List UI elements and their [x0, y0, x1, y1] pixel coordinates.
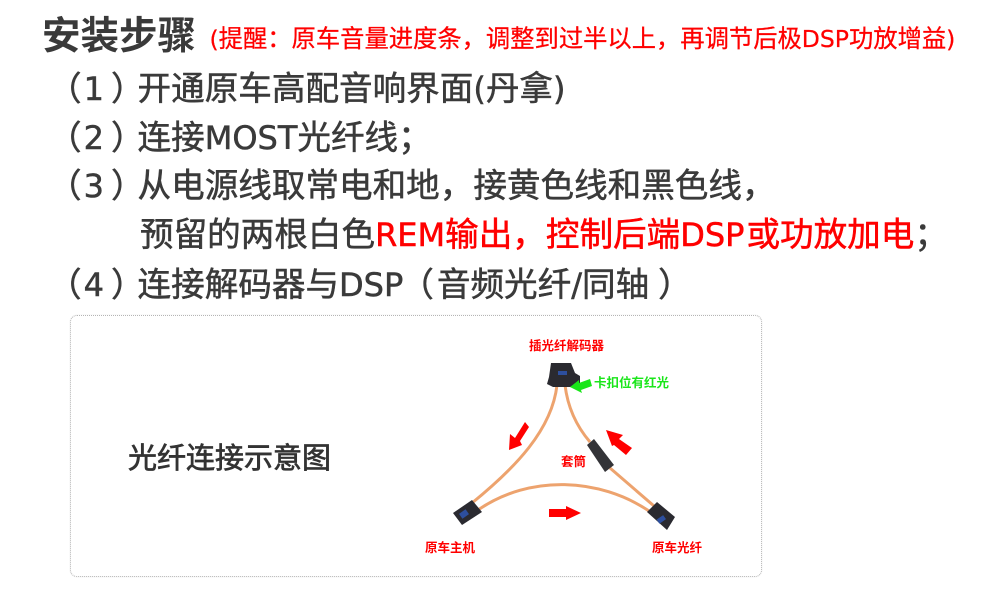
reminder note: (提醒：原车音量进度条，调整到过半以上，再调节后极DSP功放增益) — [210, 19, 955, 54]
cable: head unit to car fibre — [478, 485, 649, 511]
panel heading: 光纤连接示意图 — [128, 435, 331, 477]
cable: car fibre to decoder with sleeve — [565, 385, 654, 506]
step 1: （1）开通原车高配音响界面(丹拿) — [48, 61, 565, 110]
head unit connector — [453, 500, 482, 525]
label: head unit: 原车主机 — [425, 537, 476, 556]
title: 安装步骤 — [42, 5, 196, 61]
decoder connector — [547, 363, 580, 387]
step 4: （4）连接解码器与DSP（音频光纤/同轴 ） — [48, 257, 692, 306]
arrow: right — [549, 506, 581, 520]
panel: fibre diagram — [70, 315, 762, 577]
car fibre connector — [647, 502, 675, 530]
label: car fibre: 原车光纤 — [652, 537, 703, 556]
step 2: （2）连接MOST光纤线； — [48, 110, 432, 159]
arrow: green — [570, 379, 592, 393]
arrow: down-left — [509, 422, 529, 450]
label: red light: 卡扣位有红光 — [594, 372, 670, 391]
sleeve — [587, 439, 614, 472]
arrow: up-left — [606, 430, 632, 455]
cable: decoder to head unit — [472, 385, 557, 503]
label: sleeve: 套筒 — [561, 451, 586, 470]
step 3 continuation: 预留的两根白色REM输出，控制后端DSP或功放加电； — [140, 207, 948, 256]
label: decoder: 插光纤解码器 — [529, 335, 605, 354]
step 3: （3）从电源线取常电和地，接黄色线和黑色线， — [48, 158, 776, 207]
